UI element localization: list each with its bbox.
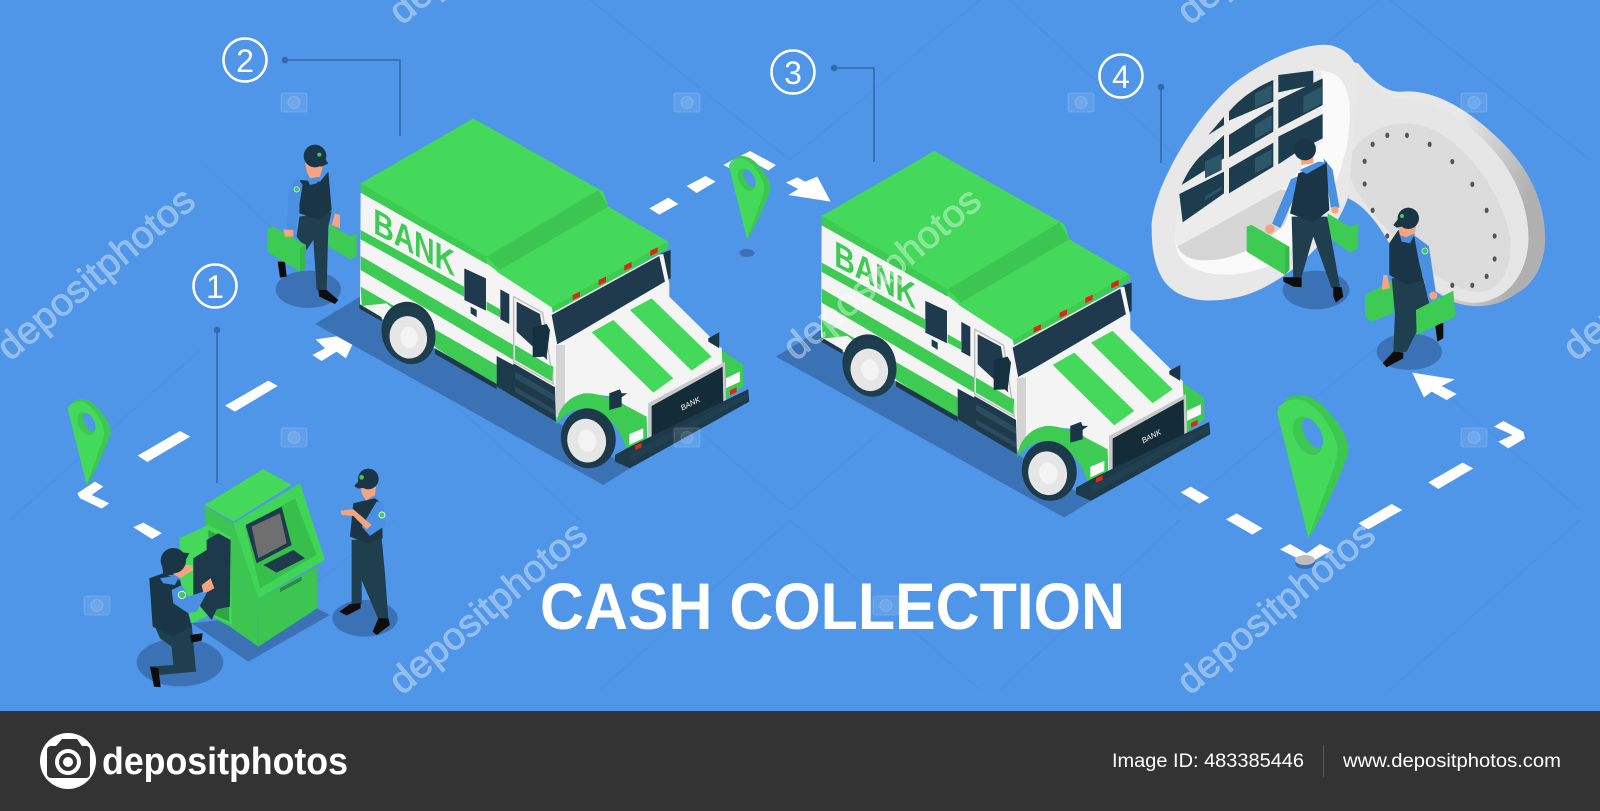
truck 1 [315, 118, 749, 485]
truck 2 [776, 151, 1210, 518]
truck lettering side: BANK [373, 201, 455, 285]
step number 4 [1100, 54, 1142, 98]
watermarks: depositphotos [1169, 513, 1383, 703]
vault door [1345, 60, 1545, 306]
vault frame [1152, 45, 1359, 300]
step number 2 [224, 38, 266, 82]
image id: Image ID: 483385446 [1112, 751, 1304, 772]
title: CASH COLLECTION [540, 569, 1125, 643]
footer logo icon [40, 733, 96, 789]
icon: location pin top [729, 156, 770, 239]
leader lines [214, 58, 1164, 483]
icon: location pin left [68, 399, 111, 485]
truck lettering side: BANK [834, 233, 916, 318]
website url: www.depositphotos.com [1342, 751, 1561, 772]
step number 2: 2 [236, 43, 254, 79]
ATM group [137, 469, 398, 687]
guard front view [1365, 208, 1455, 370]
truck lettering grille: BANK [679, 395, 702, 412]
vault group [1152, 45, 1545, 370]
guard standing with crossed arms [332, 469, 398, 637]
watermark camera marks [84, 93, 1487, 615]
guard carrying cases near truck [267, 145, 357, 308]
watermarks: depositphotos [775, 179, 989, 369]
icon: location pin right [1277, 395, 1349, 569]
watermarks: depositphotos [381, 513, 595, 703]
deposit boxes [1179, 71, 1323, 222]
pin shadow [740, 249, 754, 257]
step number 1: 1 [206, 269, 224, 305]
step number 4: 4 [1112, 59, 1130, 95]
ATM machine [179, 469, 325, 647]
route: dashes and arrows [77, 151, 1525, 564]
truck lettering grille: BANK [1140, 427, 1163, 445]
guard back view [1247, 138, 1358, 309]
step number 3: 3 [784, 55, 802, 91]
footer bar [0, 711, 1600, 811]
footer logo wordmark: depositphotos [102, 741, 348, 783]
guard kneeling [137, 548, 223, 687]
step number 1 [194, 264, 236, 308]
step number 3 [772, 50, 814, 94]
